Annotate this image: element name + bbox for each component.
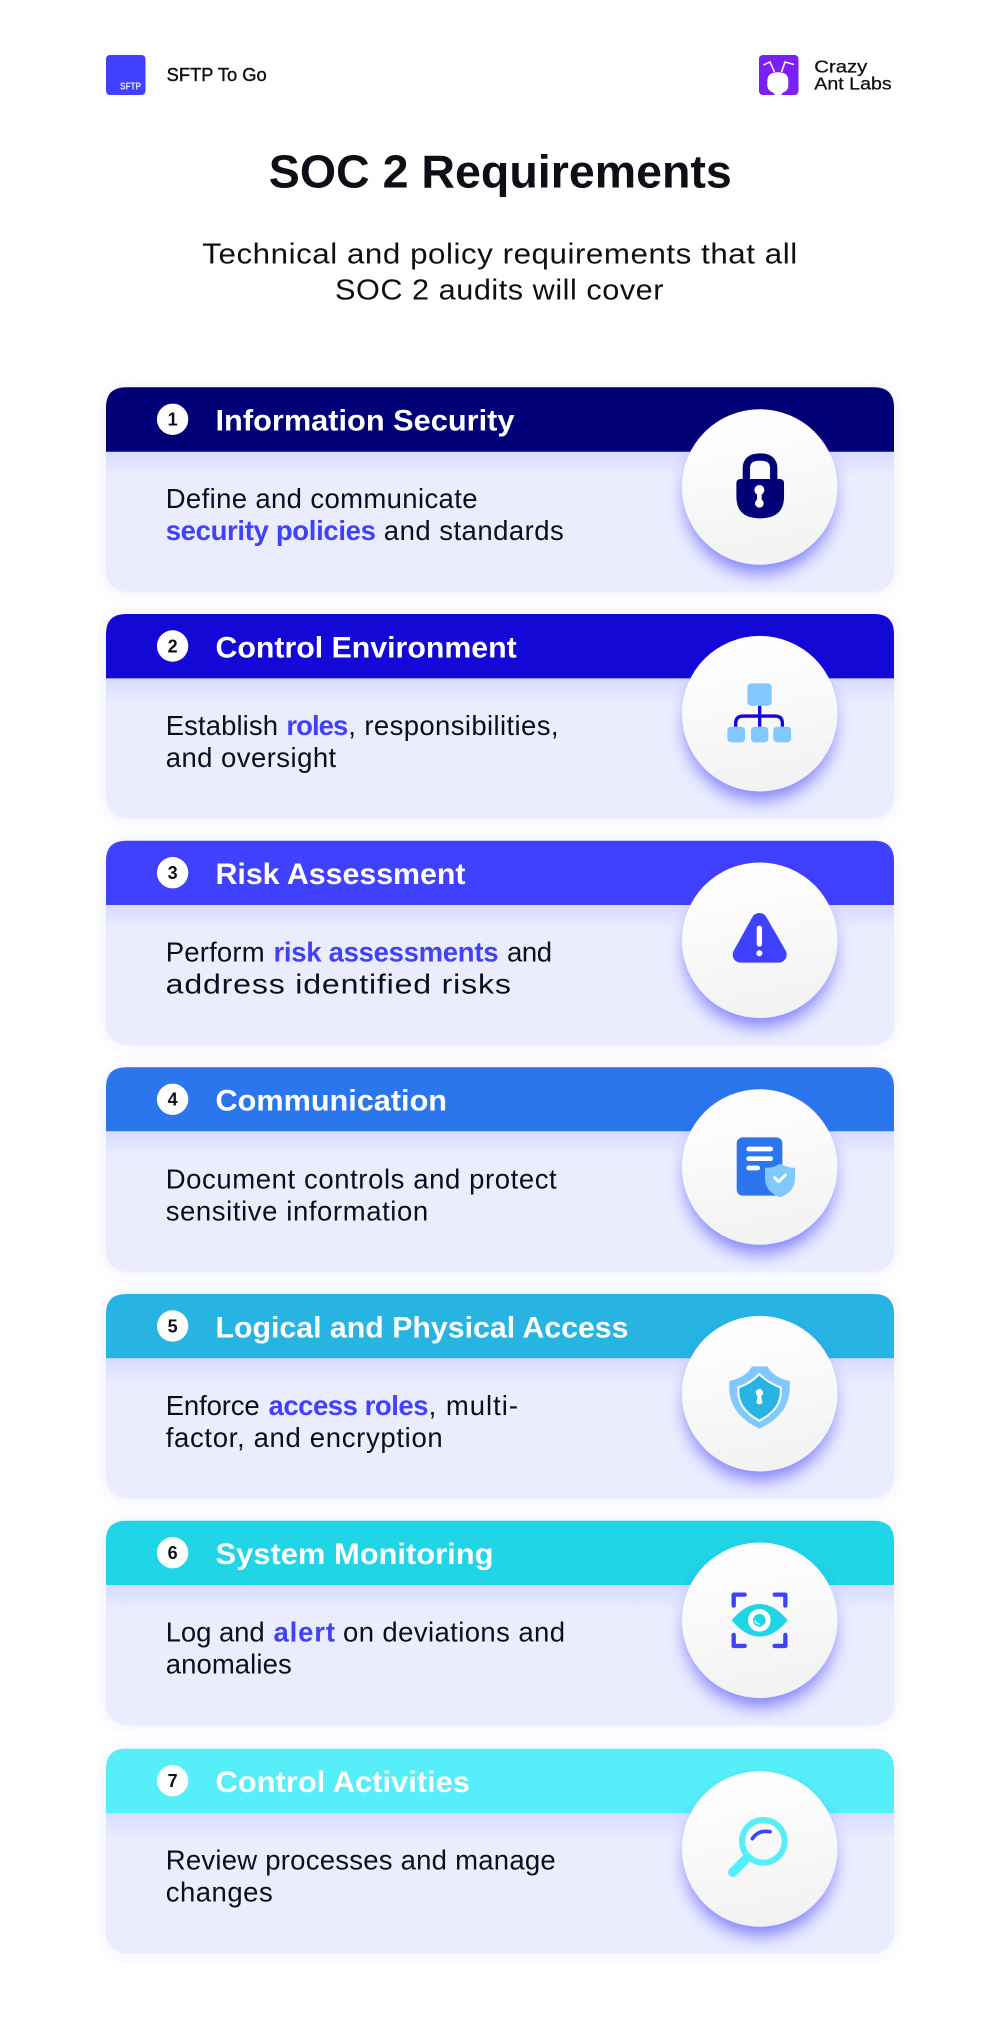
description: , responsibilities,: [348, 710, 558, 741]
description: security policies: [166, 515, 376, 546]
heading: Control Environment: [216, 631, 517, 664]
description: on deviations and: [343, 1617, 565, 1648]
subtitle: [202, 238, 798, 306]
logo: Crazy Ant Labs: Crazy: [814, 56, 868, 76]
description: Log and: [166, 1617, 265, 1648]
description: Enforce: [166, 1390, 260, 1421]
logo: SFTP To Go: SFTP: [120, 81, 141, 92]
heading: Logical and Physical Access: [216, 1311, 628, 1344]
description: and standards: [384, 515, 564, 546]
panel: 3 Risk Assessment: [106, 841, 894, 1045]
icon: padlock: [682, 409, 838, 573]
panel: 5 Logical and Physical Access: [106, 1294, 894, 1498]
description: [166, 937, 552, 1000]
heading: Risk Assessment: [216, 858, 466, 891]
number badge: [157, 404, 188, 435]
number badge: [157, 857, 188, 888]
title: SOC 2 Requirements: [269, 145, 732, 197]
description: sensitive information: [166, 1195, 428, 1226]
logo: SFTP To Go: [106, 55, 267, 95]
number badge: 6: [168, 1543, 178, 1563]
icon: warning triangle: [682, 862, 838, 1026]
description: [166, 1845, 556, 1908]
number badge: [157, 1765, 188, 1796]
description: [166, 1617, 565, 1680]
heading: System Monitoring: [216, 1538, 494, 1571]
description: anomalies: [166, 1649, 292, 1680]
logo: Crazy Ant Labs: [759, 55, 892, 95]
number badge: 1: [168, 410, 178, 430]
description: [166, 710, 558, 773]
panel: 4 Communication: [106, 1067, 894, 1272]
number badge: [157, 1537, 188, 1568]
icon: hierarchy: [682, 636, 838, 800]
number badge: 5: [168, 1316, 178, 1336]
number badge: [157, 1084, 188, 1115]
icon: shield with keyhole: [682, 1316, 838, 1480]
description: [166, 483, 564, 546]
panel: 6 System Monitoring: [106, 1521, 894, 1725]
number badge: 2: [168, 636, 178, 656]
description: risk assessments: [274, 937, 498, 968]
description: Establish: [166, 710, 278, 741]
number badge: 3: [168, 863, 178, 883]
panel: 2 Control Environment: [106, 614, 894, 818]
description: and oversight: [166, 742, 337, 773]
logo: SFTP To Go: SFTP To Go: [167, 65, 267, 85]
description: Review processes and manage: [166, 1845, 556, 1876]
number badge: 4: [168, 1090, 178, 1110]
description: Define and communicate: [166, 483, 477, 514]
panel: 1 Information Security: [106, 387, 894, 592]
description: , multi-: [429, 1390, 518, 1421]
description: roles: [286, 710, 348, 741]
header bar: [106, 1749, 894, 1813]
description: and: [507, 937, 552, 968]
heading: Control Activities: [216, 1766, 470, 1799]
heading: Information Security: [216, 405, 515, 438]
description: Perform: [166, 937, 265, 968]
header bar: [106, 614, 894, 678]
description: address identified risks: [166, 969, 512, 1000]
description: factor, and encryption: [166, 1422, 443, 1453]
description: [166, 1390, 518, 1453]
description: [166, 1163, 557, 1226]
icon: eye scan: [682, 1542, 838, 1706]
header bar: [106, 1294, 894, 1358]
header bar: [106, 1521, 894, 1585]
description: changes: [166, 1877, 273, 1908]
panel: 7 Control Activities: [106, 1749, 894, 1953]
header bar: [106, 387, 894, 452]
number badge: 7: [168, 1771, 178, 1791]
logo: Crazy Ant Labs: Ant Labs: [814, 73, 892, 93]
subtitle: Technical and policy requirements that all: [202, 238, 798, 270]
description: alert: [274, 1617, 335, 1648]
header bar: [106, 1067, 894, 1131]
description: access roles: [268, 1390, 428, 1421]
description: Document controls and protect: [166, 1163, 557, 1194]
number badge: [157, 630, 188, 662]
subtitle: SOC 2 audits will cover: [335, 274, 664, 306]
heading: Communication: [216, 1085, 447, 1118]
icon: document with shield: [682, 1089, 838, 1253]
header bar: [106, 841, 894, 905]
icon: magnifier: [682, 1771, 838, 1935]
number badge: [157, 1310, 188, 1342]
